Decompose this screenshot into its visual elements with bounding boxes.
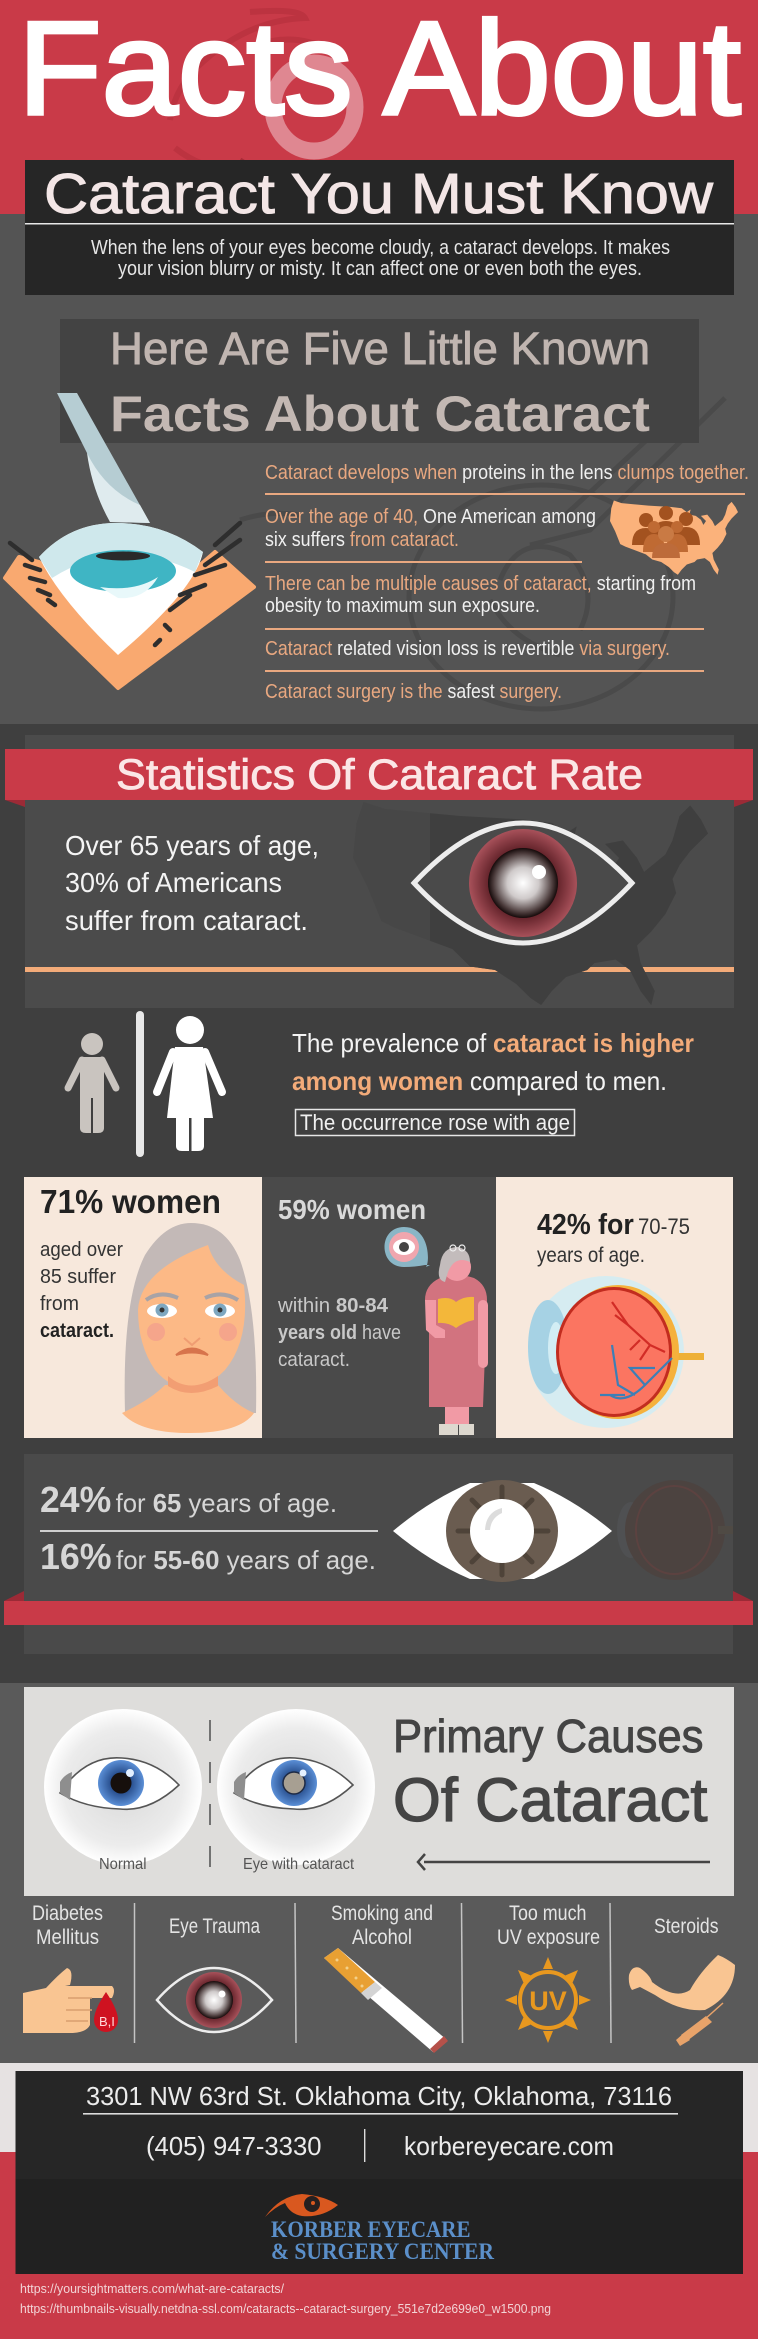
icon: cataract eye [157,1968,272,2032]
heading: Of Cataract: Of Cataract [393,1766,708,1834]
cause: too much UV exposure: Too much [509,1902,586,1925]
icon: eye with cataract [217,1709,375,1865]
stat: 24% for 65: 24% for 65 years of age. [40,1479,337,1520]
sources: https://thumbnails-visually.netdna-ssl.com/cataracts--cataract-surgery_551e7d2e699e0_w1500.png [20,2301,551,2316]
cause: diabetes mellitus: Mellitus [36,1926,99,1949]
icon: arm with syringe [629,1955,735,2046]
cause: diabetes mellitus [23,1902,118,2033]
fact 3: There can be multiple causes of cataract, starting from [265,572,711,595]
website: korbereyecare.com [404,2131,614,2161]
stat description: cataract. [278,1348,350,1371]
panel: 42% for 70-75 [496,1177,733,1438]
sources: https://yoursightmatters.com/what-are-cataracts/ [20,2281,284,2296]
label: Normal: Normal [99,1856,146,1873]
illustration: speech bubble eye [384,1227,430,1267]
stat description: within 80-84 [278,1294,388,1317]
phone: (405) 947-3330 [146,2131,322,2161]
icon: normal eye [44,1709,202,1865]
cause: steroids: Steroids [654,1915,718,1938]
background: footer red [0,2152,758,2339]
fact 2: Over the age of 40, One American among [265,505,621,528]
cause dividers [134,1903,611,2043]
text: prevalence among women [292,1028,694,1096]
fact 2: six suffers from cataract. [265,528,476,551]
icon: finger blood drop: B,I [99,2014,115,2029]
intro paragraph: When the lens of your eyes become cloudy, a cataract develops. It makes [91,237,670,259]
background: causes section grey [0,1683,758,2063]
stat: 71% women: 71% women [40,1183,221,1220]
logo: Korber Eyecare [265,2194,494,2264]
illustration: eye anatomy [528,1276,704,1428]
icon: cigarette [324,1948,448,2053]
icon: man and woman [68,1011,222,1157]
heading: Statistics Of Cataract Rate: Statistics Of Cataract Rate [116,751,643,799]
intro paragraph: your vision blurry or misty. It can affect one or even both the eyes. [118,258,642,280]
panel: 59% women [262,1177,496,1438]
map silhouette dark part [446,809,702,1001]
ghost eye outline behind facts [240,398,725,709]
background: facts section grey [0,214,758,724]
stat description: 85 suffer [40,1265,116,1288]
icon: UV sun [505,1957,591,2043]
heading: Cataract You Must Know: Cataract You Must Know [44,162,714,226]
label: Eye with cataract: Eye with cataract [243,1856,355,1873]
icon: eye with cataract [414,823,632,943]
icon: US map with people [610,501,738,575]
panel: statistics top [25,735,734,1008]
stat description: years old have [278,1321,407,1344]
cause: eye trauma: Eye Trauma [169,1915,260,1938]
stat description: from [40,1292,79,1315]
dashed divider [209,1720,211,1887]
text: over 65: 30% of Americans [65,867,282,898]
rule [25,967,734,972]
cause: eye trauma [157,1915,272,2032]
woman [157,1016,222,1151]
background: statistics section dark [0,724,758,1683]
text: prevalence among women: The prevalence of cataract is higher [292,1028,694,1058]
fact 5: Cataract surgery is the safest surgery. [265,680,562,703]
cause: too much UV exposure [497,1902,600,2043]
illustration: eye surgery with scalpel [5,393,254,688]
cause: diabetes mellitus: Diabetes [32,1902,103,1925]
heading: Here Are Five Little Known: Here Are Five Little Known [110,323,650,374]
panel: 71% women [24,1177,262,1438]
logo: Korber Eyecare: & SURGERY CENTER [271,2239,494,2264]
text: over 65: Over 65 years of age, [65,830,319,861]
fact 4: Cataract related vision loss is revertible via surgery. [265,637,670,660]
cause: smoking and alcohol: Smoking and [331,1902,433,1925]
heading: Primary Causes: Primary Causes [393,1710,704,1762]
ribbon: statistics heading [5,749,753,807]
callout: occurrence rose with age: The occurrence rose with age [300,1110,570,1135]
text: prevalence among women: among women compared to men. [292,1066,667,1096]
background: footer light band [0,2063,758,2152]
logo: Korber Eyecare: KORBER EYECARE [271,2217,470,2242]
stat description: cataract. [40,1319,114,1342]
sources [20,2281,551,2316]
divider [40,1530,378,1532]
panel: five facts heading [60,319,699,443]
cause: smoking and alcohol [324,1902,448,2053]
panel: primary causes [24,1687,734,1896]
man [68,1033,116,1133]
text: over 65: suffer from cataract. [65,905,308,936]
panel: contact [16,2071,743,2274]
address: 3301 NW 63rd St. Oklahoma City, Oklahoma, 73116 [86,2081,672,2111]
ribbon: bottom of stats [4,1454,753,1654]
cause: too much UV exposure: UV exposure [497,1926,600,1949]
fact 3: obesity to maximum sun exposure. [265,594,540,617]
background: header red [0,0,758,214]
cause: steroids [629,1915,735,2046]
icon: UV sun: UV [529,1986,567,2016]
fact 1: Cataract develops when proteins in the lens clumps together. [265,461,749,484]
panel: intro [25,160,734,295]
icon: brown eye [393,1480,612,1582]
icon: ghost eyeball [617,1480,733,1580]
illustration: older woman face [122,1223,256,1433]
facts list [265,461,749,703]
decorative ghost eye in header [170,11,355,170]
cause: smoking and alcohol: Alcohol [352,1926,412,1949]
stat: 59% women: 59% women [278,1194,426,1225]
heading: Facts About Cataract: Facts About Cataract [110,386,650,442]
map silhouette faint part [353,802,708,1005]
stat: 16% for 55-60: 16% for 55-60 years of age. [40,1536,376,1577]
stat description: years of age. [537,1244,645,1267]
illustration: old woman reading [425,1245,488,1435]
arrow [418,1854,710,1870]
stat description: aged over [40,1238,123,1261]
stat: 42%: 42% for 70-75 [537,1209,690,1241]
